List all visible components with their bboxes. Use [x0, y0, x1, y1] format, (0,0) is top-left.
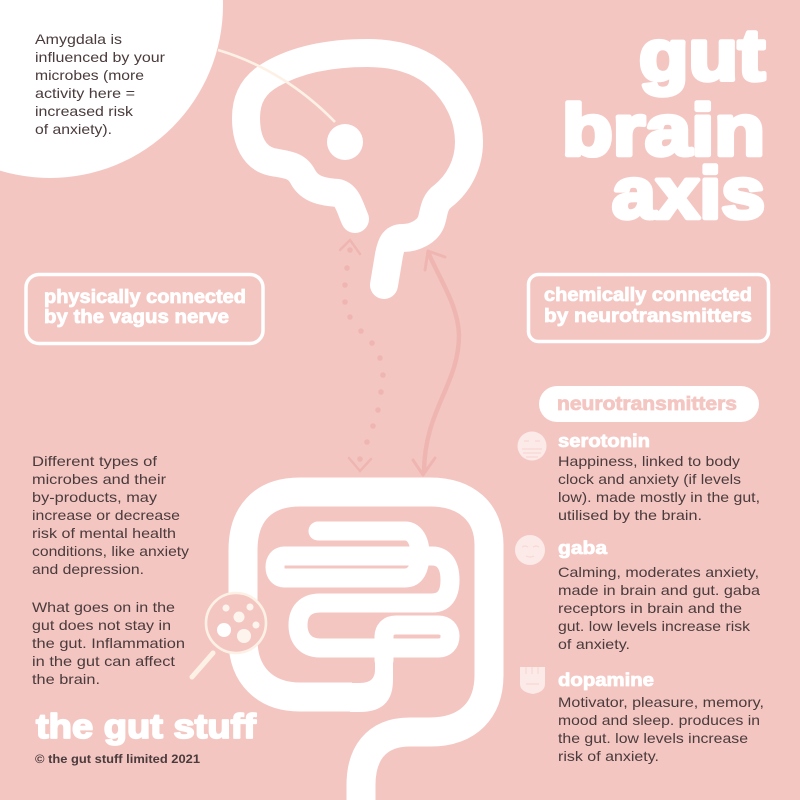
title: axis	[612, 154, 765, 234]
text block: microbes: and depression.	[32, 561, 144, 577]
text block: microbes: risk of mental health	[32, 525, 176, 541]
text block: serotonin: low). made mostly in the gut,	[558, 489, 760, 505]
icon: dopamine fist	[520, 667, 545, 694]
text block: gaba: of anxiety.	[558, 636, 630, 652]
text block: microbes: in the gut can affect	[32, 653, 175, 669]
title: brain	[562, 91, 765, 171]
heading pill: neurotransmitters	[539, 386, 759, 422]
callout: amygdala: of anxiety).	[35, 121, 112, 137]
text block: gaba: receptors in brain and the	[558, 600, 742, 616]
panel: physically connected: physically connected	[44, 287, 246, 308]
panel: chemically connected: by neurotransmitters	[544, 306, 752, 327]
text block: microbes: What goes on in the	[32, 599, 175, 615]
arrow: dotted vagus nerve	[340, 240, 386, 471]
text block: gaba	[558, 538, 760, 652]
title: gut	[639, 16, 765, 96]
text block: microbes: by-products, may	[32, 489, 157, 505]
text block: dopamine: Motivator, pleasure, memory,	[558, 694, 764, 710]
text block: dopamine: dopamine	[558, 670, 654, 690]
icon: gaba face	[515, 535, 545, 565]
logo: the gut stuff	[36, 708, 257, 746]
text block: microbes: the gut. Inflammation	[32, 635, 185, 651]
title	[562, 16, 765, 234]
text block: microbes: gut does not stay in	[32, 617, 171, 633]
callout: amygdala: influenced by your	[35, 49, 165, 65]
text block: serotonin: serotonin	[558, 431, 650, 451]
copyright: © the gut stuff limited 2021	[35, 752, 200, 766]
icon: brain outline	[246, 53, 469, 285]
callout: amygdala: activity here =	[35, 85, 135, 101]
text block: serotonin: Happiness, linked to body	[558, 453, 740, 469]
icon: serotonin face	[518, 432, 546, 460]
callout: amygdala: increased risk	[35, 103, 134, 119]
text block: microbes	[32, 453, 189, 687]
text block: serotonin	[558, 431, 760, 523]
icon: amygdala marker	[218, 50, 363, 160]
callout: amygdala	[0, 0, 223, 178]
text block: serotonin: utilised by the brain.	[558, 507, 702, 523]
text block: microbes: the brain.	[32, 671, 100, 687]
heading pill: neurotransmitters: neurotransmitters	[557, 394, 737, 415]
callout: amygdala: microbes (more	[35, 67, 144, 83]
text block: dopamine: mood and sleep. produces in	[558, 712, 760, 728]
text block: microbes: microbes and their	[32, 471, 166, 487]
text block: serotonin: clock and anxiety (if levels	[558, 471, 741, 487]
panel: chemically connected	[528, 274, 768, 342]
text block: gaba: made in brain and gut. gaba	[558, 582, 760, 598]
text block: dopamine: risk of anxiety.	[558, 748, 659, 764]
text block: dopamine	[558, 670, 764, 764]
text block: dopamine: the gut. low levels increase	[558, 730, 748, 746]
panel: physically connected	[26, 274, 263, 344]
text block: gaba: Calming, moderates anxiety,	[558, 564, 759, 580]
icon: gut	[243, 492, 489, 800]
text block: microbes: Different types of	[32, 453, 157, 469]
panel: chemically connected: chemically connected	[544, 285, 752, 306]
icon: magnifier with microbes	[192, 593, 266, 677]
text block: gaba: gaba	[558, 538, 608, 558]
panel: physically connected: by the vagus nerve	[44, 307, 229, 328]
callout: amygdala: Amygdala is	[35, 31, 122, 47]
text block: microbes: conditions, like anxiety	[32, 543, 189, 559]
arrow: solid neurotransmitter link	[413, 251, 459, 475]
text block: gaba: gut. low levels increase risk	[558, 618, 751, 634]
text block: microbes: increase or decrease	[32, 507, 180, 523]
